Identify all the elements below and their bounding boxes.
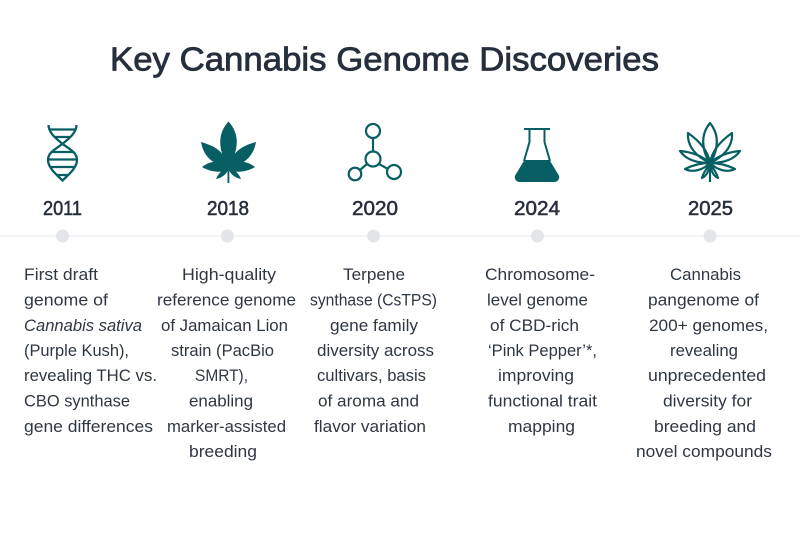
text: 2018 discovery: strain (PacBio: [171, 341, 274, 360]
text: 2020 discovery: Terpene: [343, 265, 405, 284]
timeline: [0, 230, 800, 242]
text: 2011 discovery: Cannabis sativa: [24, 316, 142, 335]
text: 2020 discovery: diversity across: [317, 341, 434, 360]
text: 2011 discovery: genome of: [24, 290, 108, 310]
text: 2011 discovery: CBO synthase: [24, 392, 130, 410]
text: 2020 discovery: [310, 265, 437, 436]
text: 2025 discovery: Cannabis: [670, 265, 741, 284]
icon: molecule: [349, 124, 401, 180]
text: 2025 discovery: revealing: [670, 341, 738, 360]
text: 2025 discovery: [636, 265, 772, 461]
year: 2024: 2024: [514, 198, 560, 220]
text: 2024 discovery: Chromosome-: [485, 265, 595, 284]
text: 2020 discovery: of aroma and: [318, 392, 419, 410]
text: 2018 discovery: of Jamaican Lion: [161, 316, 288, 335]
icon: flask: [515, 129, 559, 182]
text: 2018 discovery: breeding: [189, 442, 257, 461]
text: 2025 discovery: novel compounds: [636, 442, 772, 461]
text: 2024 discovery: level genome: [487, 290, 588, 310]
text: 2020 discovery: flavor variation: [314, 417, 426, 436]
text: 2018 discovery: High-quality: [182, 265, 277, 284]
text: 2018 discovery: reference genome: [157, 290, 296, 310]
text: 2020 discovery: gene family: [330, 316, 419, 335]
year: 2020: 2020: [352, 198, 398, 220]
text: 2020 discovery: cultivars, basis: [317, 366, 426, 385]
text: 2024 discovery: ‘Pink Pepper’*,: [488, 341, 597, 360]
text: 2018 discovery: enabling: [189, 392, 253, 410]
year: 2025: 2025: [688, 198, 733, 220]
text: 2025 discovery: breeding and: [654, 417, 756, 436]
text: 2024 discovery: mapping: [508, 417, 575, 436]
text: 2024 discovery: of CBD-rich: [490, 316, 579, 335]
text: 2020 discovery: synthase (CsTPS): [310, 290, 437, 310]
text: 2011 discovery: (Purple Kush),: [24, 341, 129, 360]
year: 2018: 2018: [207, 198, 249, 220]
text: 2018 discovery: [157, 265, 296, 461]
text: 2011 discovery: gene differences: [24, 417, 153, 436]
title: Key Cannabis Genome Discoveries: [110, 42, 659, 78]
text: 2024 discovery: functional trait: [488, 392, 597, 410]
text: 2024 discovery: [485, 265, 597, 436]
icon: outlined cannabis leaf: [680, 123, 740, 182]
text: 2025 discovery: pangenome of: [648, 290, 759, 310]
icon: DNA helix: [48, 125, 77, 181]
text: 2025 discovery: diversity for: [663, 392, 752, 410]
text: 2025 discovery: 200+ genomes,: [649, 316, 768, 335]
icon: solid cannabis leaf: [201, 122, 256, 183]
text: 2018 discovery: SMRT),: [195, 366, 248, 385]
text: 2018 discovery: marker-assisted: [167, 417, 286, 436]
text: 2024 discovery: improving: [498, 366, 574, 385]
text: 2011 discovery: revealing THC vs.: [24, 366, 157, 385]
text: 2011 discovery: [24, 265, 157, 436]
text: 2025 discovery: unprecedented: [648, 366, 766, 385]
text: 2011 discovery: First draft: [24, 265, 98, 284]
year: 2011: 2011: [43, 198, 82, 220]
